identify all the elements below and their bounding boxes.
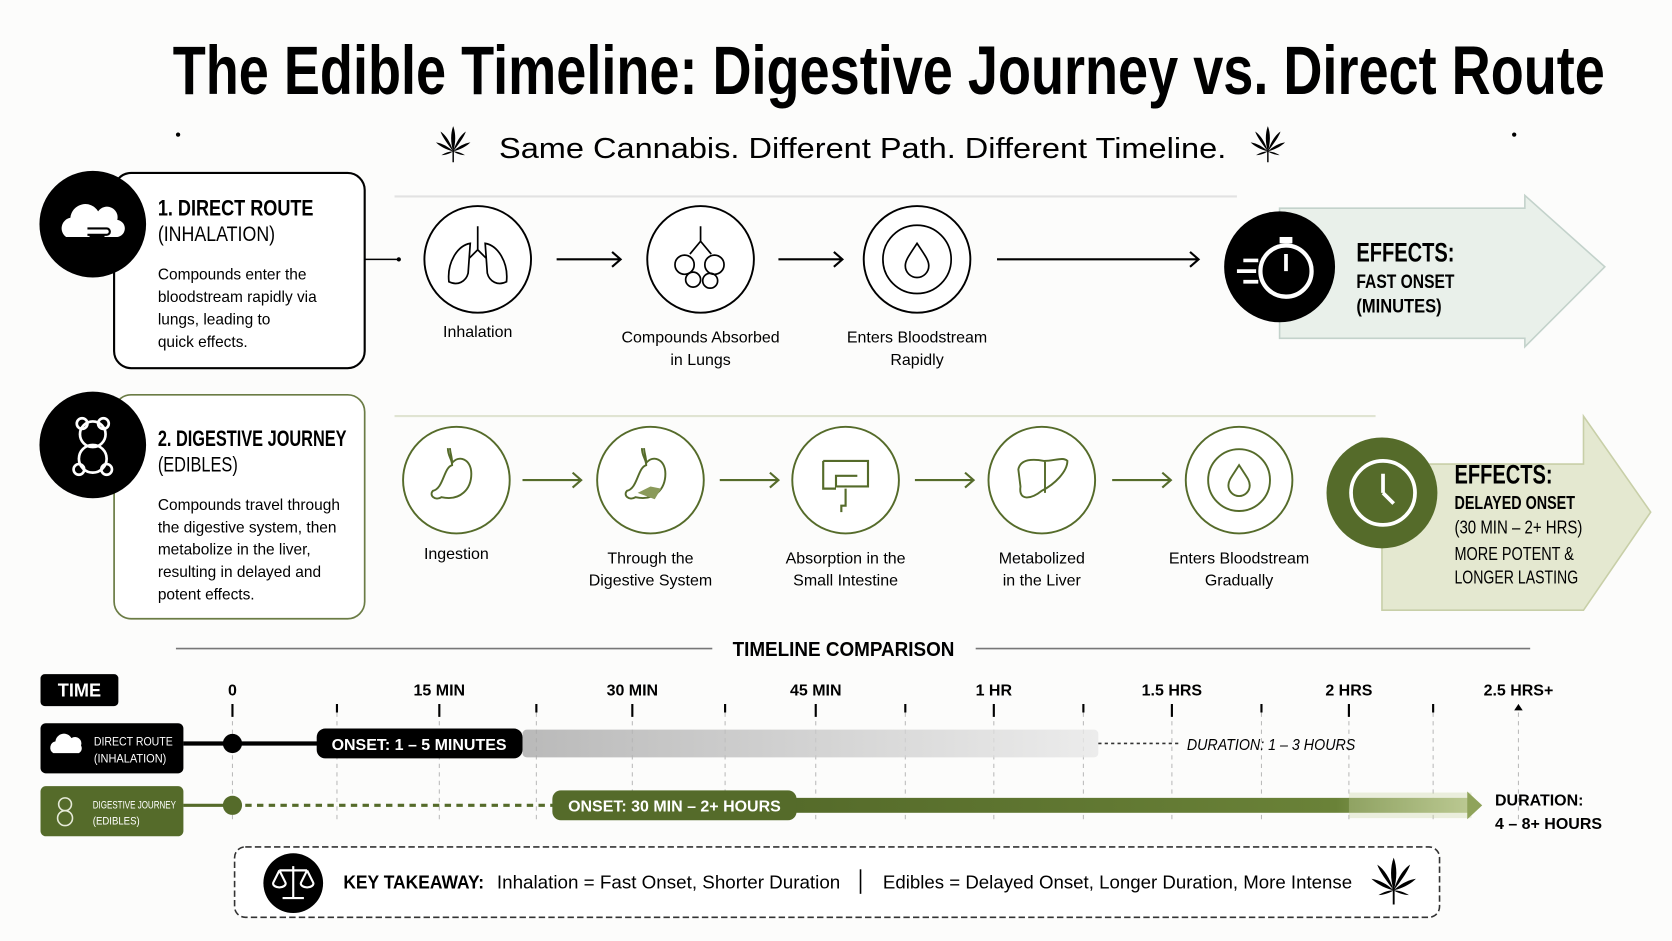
axis labels: 1 HR bbox=[976, 682, 1012, 699]
callout: key takeaway bbox=[235, 847, 1440, 917]
step: small intestine: Absorption in the bbox=[786, 550, 906, 567]
panel: direct route bbox=[39, 171, 1237, 368]
icon: leaf bbox=[1371, 858, 1416, 904]
icon: cloud bbox=[39, 171, 146, 277]
row: digestive journey: (EDIBLES) bbox=[93, 816, 140, 828]
text block: digestive description: the digestive system, then bbox=[158, 519, 336, 536]
row: direct route bbox=[41, 723, 1356, 773]
step: small intestine: Small Intestine bbox=[793, 573, 898, 590]
step: digestive system: Digestive System bbox=[589, 573, 712, 590]
row: digestive journey bbox=[41, 786, 1602, 836]
text block: direct description: quick effects. bbox=[158, 334, 248, 351]
row: direct route: (INHALATION) bbox=[94, 752, 166, 766]
subtitle: Same Cannabis. Different Path. Different Timeline. bbox=[499, 133, 1226, 165]
step: small intestine bbox=[786, 427, 906, 590]
arrow bbox=[1112, 473, 1171, 488]
step: enters bloodstream gradually: Gradually bbox=[1205, 573, 1273, 590]
row: digestive journey: 4 – 8+ HOURS bbox=[1495, 816, 1602, 833]
callout: delayed onset effects: MORE POTENT & bbox=[1454, 544, 1574, 564]
heading: direct route: 1. DIRECT ROUTE bbox=[158, 196, 314, 221]
row: digestive journey: DURATION: bbox=[1495, 792, 1583, 809]
arrow bbox=[522, 473, 581, 488]
callout: fast onset effects: EFFECTS: bbox=[1356, 238, 1454, 268]
step: liver bbox=[988, 427, 1095, 590]
step: enters bloodstream gradually bbox=[1169, 427, 1309, 590]
axis labels: 45 MIN bbox=[790, 682, 842, 699]
step: inhalation bbox=[424, 206, 531, 341]
callout: fast onset effects bbox=[1224, 195, 1605, 347]
step: enters bloodstream rapidly: Enters Bloodstream bbox=[847, 330, 987, 347]
step: liver: Metabolized bbox=[999, 550, 1085, 567]
arrow bbox=[557, 252, 621, 267]
callout: delayed onset effects: DELAYED ONSET bbox=[1454, 493, 1575, 513]
step: enters bloodstream rapidly: Rapidly bbox=[890, 352, 944, 369]
icon: gummy bear bbox=[39, 392, 146, 498]
step: ingestion bbox=[403, 427, 510, 563]
row: digestive journey: ONSET: 30 MIN – 2+ HOURS bbox=[568, 799, 781, 816]
step: digestive system bbox=[589, 427, 712, 590]
icon: stopwatch bbox=[1224, 211, 1335, 322]
axis labels bbox=[228, 682, 1553, 699]
callout: fast onset effects: (MINUTES) bbox=[1356, 297, 1442, 318]
icon: clock bbox=[1327, 437, 1437, 548]
panel: digestive journey bbox=[39, 392, 1376, 619]
panel: direct route: (INHALATION) bbox=[158, 222, 275, 246]
step: enters bloodstream rapidly bbox=[847, 206, 987, 369]
arrow bbox=[778, 252, 842, 267]
step: inhalation: Inhalation bbox=[443, 324, 512, 341]
row: digestive journey: DIGESTIVE JOURNEY bbox=[93, 800, 176, 812]
heading: digestive journey: 2. DIGESTIVE JOURNEY bbox=[158, 426, 347, 451]
text block: digestive description: potent effects. bbox=[158, 587, 255, 604]
heading: timeline comparison: TIMELINE COMPARISON bbox=[733, 639, 954, 661]
axis labels: 2 HRS bbox=[1325, 682, 1373, 699]
step: absorbed in lungs: Compounds Absorbed bbox=[621, 330, 780, 347]
text block: direct description: lungs, leading to bbox=[158, 311, 270, 328]
chart: timeline bbox=[41, 674, 1602, 836]
callout: key takeaway: Inhalation = Fast Onset, Shorter Duration bbox=[497, 873, 840, 893]
subtitle bbox=[436, 126, 1285, 165]
callout: key takeaway: KEY TAKEAWAY: bbox=[343, 873, 484, 893]
row: direct route: ONSET: 1 – 5 MINUTES bbox=[332, 737, 507, 754]
arrow bbox=[997, 252, 1199, 267]
text block: direct description: Compounds enter the bbox=[158, 267, 306, 284]
text block: digestive description bbox=[158, 497, 340, 604]
text block: digestive description: metabolize in the liver, bbox=[158, 542, 311, 559]
text block: direct description: bloodstream rapidly via bbox=[158, 289, 317, 306]
step: digestive system: Through the bbox=[607, 550, 694, 567]
step: absorbed in lungs: in Lungs bbox=[670, 352, 731, 369]
callout: delayed onset effects: EFFECTS: bbox=[1454, 459, 1553, 489]
label: time bbox=[41, 674, 118, 706]
text block: digestive description: resulting in delayed and bbox=[158, 564, 321, 581]
axis labels: 2.5 HRS+ bbox=[1484, 682, 1553, 699]
text block: digestive description: Compounds travel through bbox=[158, 497, 340, 514]
callout: fast onset effects: FAST ONSET bbox=[1356, 272, 1455, 293]
panel: digestive journey: (EDIBLES) bbox=[158, 453, 238, 477]
callout: delayed onset effects: LONGER LASTING bbox=[1454, 568, 1578, 588]
step: enters bloodstream gradually: Enters Bloodstream bbox=[1169, 550, 1309, 567]
icon: scales bbox=[263, 853, 323, 913]
step: liver: in the Liver bbox=[1003, 573, 1082, 590]
callout: delayed onset effects bbox=[1327, 416, 1651, 610]
arrow bbox=[915, 473, 974, 488]
row: direct route: DURATION: 1 – 3 HOURS bbox=[1187, 737, 1356, 754]
callout: key takeaway: Edibles = Delayed Onset, Longer Duration, More Intense bbox=[883, 873, 1352, 893]
arrow bbox=[720, 473, 778, 488]
axis labels: 0 bbox=[228, 682, 237, 699]
step: absorbed in lungs bbox=[621, 206, 780, 369]
axis labels: 30 MIN bbox=[607, 682, 658, 699]
axis labels: 15 MIN bbox=[414, 682, 465, 699]
arrow bbox=[365, 258, 399, 260]
callout: delayed onset effects: (30 MIN – 2+ HRS) bbox=[1454, 517, 1582, 537]
axis labels: 1.5 HRS bbox=[1142, 682, 1202, 699]
step: ingestion: Ingestion bbox=[424, 546, 489, 563]
label: time: TIME bbox=[58, 681, 101, 701]
text block: direct description bbox=[158, 267, 317, 351]
row: direct route: DIRECT ROUTE bbox=[94, 735, 173, 749]
